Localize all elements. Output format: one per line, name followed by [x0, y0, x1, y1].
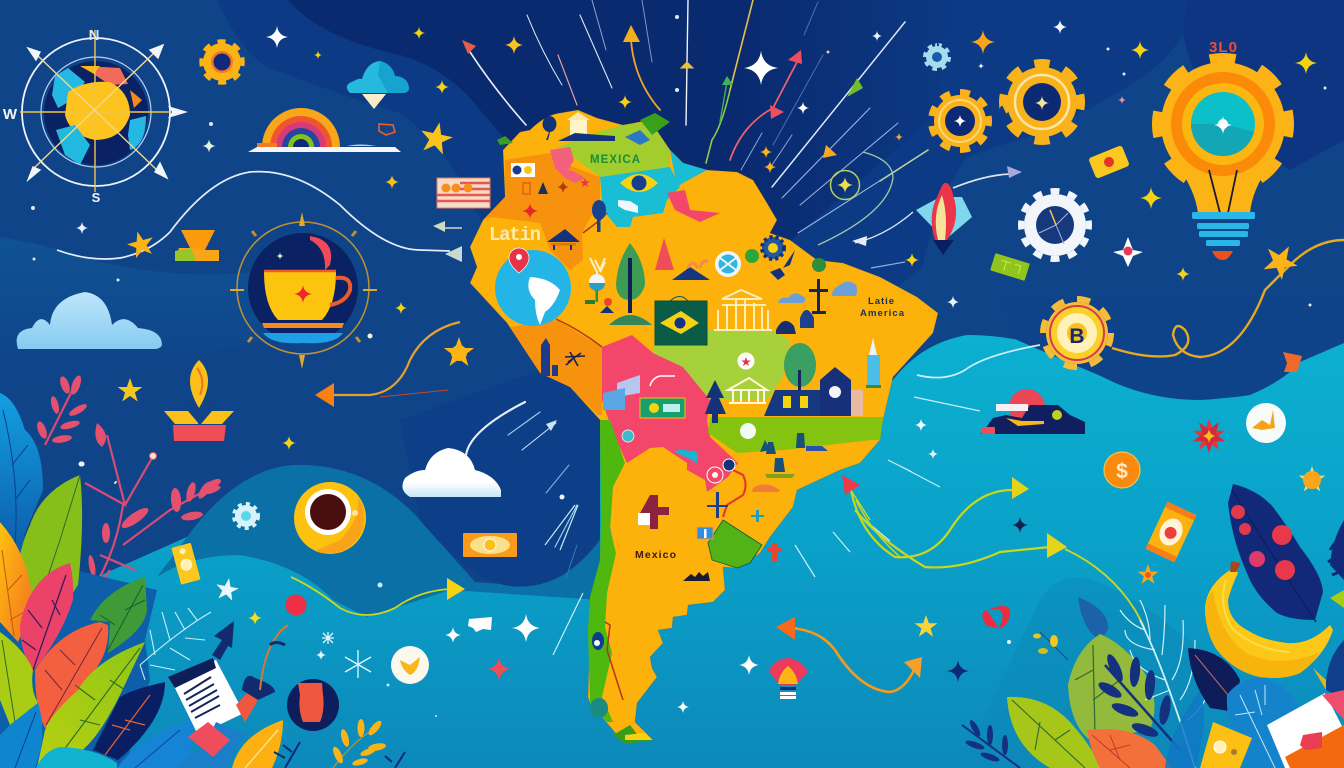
icon: blue tag	[697, 527, 713, 539]
icon: white hall	[728, 378, 767, 403]
globe	[44, 61, 148, 165]
sparkles top right	[947, 20, 1326, 308]
bulb label: 3L0	[1209, 39, 1237, 56]
region: west orange	[483, 153, 600, 270]
leaf: green top	[18, 475, 82, 620]
icon: orange banknote	[463, 533, 517, 557]
region: pink north	[667, 190, 720, 222]
leaves right edge	[1326, 520, 1344, 700]
compass rings	[22, 38, 170, 186]
region: bright green	[708, 417, 883, 453]
icon: rainbow on shelf	[248, 108, 401, 152]
icon: tree and town	[764, 343, 863, 416]
star: yellow right sea	[915, 615, 937, 637]
sparkles top centre	[505, 15, 903, 173]
leaf: orange yellow	[0, 522, 31, 642]
gear: gold large	[997, 57, 1087, 147]
icon: orange blob	[752, 484, 780, 492]
bay streaks	[466, 402, 577, 578]
icon: green banknote	[990, 253, 1030, 281]
icon: red cone	[655, 238, 674, 270]
twig	[260, 625, 288, 690]
arrow: thin with orange head	[782, 108, 870, 198]
map label: Mexico: Mexico	[635, 549, 676, 561]
icon: white block	[618, 200, 638, 213]
sparkle stars left	[31, 26, 449, 483]
leaf: blue mid	[1078, 597, 1108, 640]
leaf: blue	[0, 393, 43, 545]
icon: stilt hut	[547, 229, 580, 250]
leaf: lime edge	[1330, 590, 1344, 608]
icon: pale snow gear	[234, 504, 258, 528]
icon: cross	[809, 279, 828, 314]
pink branches	[35, 374, 223, 600]
leaf: lime big	[37, 642, 145, 768]
gear: gold small	[927, 88, 993, 154]
circle: red	[286, 594, 306, 616]
label S: S	[92, 190, 101, 205]
map: South America	[470, 110, 938, 744]
icon: cloud hill with sun	[981, 389, 1085, 434]
foliage shadow backing	[0, 520, 157, 768]
icon: blue signs	[603, 375, 640, 410]
icon: flag striped	[437, 178, 490, 208]
icon: small red cross off coast	[767, 543, 782, 562]
sprig: yellow buds	[1033, 632, 1068, 660]
icon: hot air balloon	[916, 183, 972, 255]
icon: small orange snowflake	[379, 124, 395, 135]
icon: coffee cup badge	[230, 212, 377, 369]
icon: dark pine	[705, 380, 726, 423]
icon: red flower	[1188, 413, 1232, 457]
icon: mountain glow	[688, 261, 708, 268]
fern: navy right edge	[1328, 530, 1344, 575]
icon: small green bush	[497, 136, 513, 145]
arrow: orange curve sea	[776, 617, 922, 692]
icon: gear blue	[762, 237, 784, 259]
arrow: white left	[462, 40, 526, 125]
small arrows by flag	[433, 221, 462, 262]
small lines right coast	[545, 397, 980, 655]
region: north light green	[557, 122, 670, 177]
icon: eye	[620, 174, 658, 192]
compass needles	[20, 30, 188, 192]
compass inner ring	[41, 57, 151, 167]
sprig: navy low	[962, 719, 1020, 768]
twig leaf	[270, 642, 285, 645]
icon: gear medal	[1043, 299, 1111, 367]
leaf: gold bottom	[232, 720, 283, 768]
icon: white circle bird	[391, 646, 429, 684]
icon: tree blue	[592, 200, 606, 232]
icon: pink target	[707, 467, 723, 483]
icon: white note sea	[468, 617, 492, 632]
leaf: cyan bottom	[36, 747, 117, 768]
icon: flag badge pair	[511, 163, 535, 177]
leaf: navy edge top	[1330, 520, 1344, 580]
map label: Latin America: Latie	[868, 296, 894, 307]
right bottom cluster	[962, 530, 1344, 768]
icon: banana	[1205, 561, 1333, 690]
icon: coffee cup top view	[294, 482, 366, 554]
icon: red heart	[982, 606, 1010, 629]
snowflakes sea	[322, 632, 371, 678]
arrow: gold looped path with star	[1112, 238, 1344, 357]
star on wavy line	[125, 228, 157, 259]
star: small gold left	[118, 378, 142, 402]
icon: green banner	[640, 398, 685, 418]
gear medal letter: B	[1069, 325, 1085, 348]
plant: yellow sprig	[331, 719, 386, 768]
map label: America: America	[860, 308, 905, 319]
icon: pale clouds	[778, 282, 857, 303]
icon: yellow card	[1200, 722, 1252, 768]
icon: white tower	[866, 338, 881, 388]
compass globe	[3, 27, 188, 205]
icon: pink blob	[550, 147, 585, 183]
arrow: white with green head	[772, 22, 905, 187]
icon: teal plus	[751, 510, 764, 522]
icon: plum cross	[638, 495, 669, 529]
leaf: navy	[93, 682, 165, 760]
icon: target with curved arrow	[818, 152, 913, 246]
leaf: coral low	[1087, 729, 1172, 768]
icon: orange burst	[1299, 466, 1325, 491]
pale curve to medal	[917, 345, 1040, 378]
arrow: orange up	[623, 25, 660, 110]
leaf: blue low	[0, 703, 42, 768]
icon: mini mountains	[683, 572, 710, 581]
icon: mountain	[672, 267, 710, 280]
icon: small orange flower	[1138, 564, 1158, 584]
icon: columned building	[714, 290, 772, 330]
icon: tree on plate	[765, 458, 795, 478]
leaf: lime low	[1007, 697, 1100, 768]
arrow: white curved	[466, 402, 525, 455]
arrow: white to gears	[953, 166, 1022, 188]
spark: yellow	[248, 611, 262, 625]
arrow: orange curve to left	[315, 322, 460, 407]
icon: mini west row	[522, 178, 590, 219]
navy petals	[242, 676, 275, 700]
icon: cloud parachute	[347, 61, 409, 109]
map label: Latin: Latin	[489, 224, 541, 246]
gear: pale blue small	[925, 45, 949, 69]
document sheet	[168, 658, 244, 735]
arrow: yellow small	[871, 253, 919, 268]
icon: red gem star	[1113, 237, 1143, 267]
label W: W	[3, 106, 18, 123]
leaf: pink	[20, 563, 73, 672]
icon: arc	[650, 376, 675, 386]
white fern left	[140, 608, 211, 680]
icon: small house and hills north	[558, 112, 670, 145]
region: south-west orange	[510, 320, 602, 415]
leaf: blue under fern	[1165, 690, 1204, 768]
icon: gold note	[171, 543, 201, 585]
arrow: red tip yellow swirl	[842, 475, 1145, 630]
region: light green centre	[653, 330, 790, 400]
feather: white fern	[1120, 600, 1205, 768]
icon: dark trees bottom	[760, 433, 828, 454]
region: Pacific green strip	[588, 420, 625, 722]
icon: hourglass block	[175, 230, 219, 261]
star: white	[214, 576, 240, 602]
arrow: navy up	[212, 621, 234, 660]
icon: teal seal	[622, 430, 634, 442]
icon: dark circle with red	[287, 679, 339, 731]
arrow: yellow left sea	[291, 577, 465, 615]
left leaves cluster	[0, 393, 193, 768]
icon: green round	[812, 258, 826, 272]
icon: white cloud	[402, 448, 501, 497]
icon: light blue cloud	[17, 292, 162, 349]
icon: dark domes	[776, 310, 814, 334]
icon: lotus lamp	[164, 360, 234, 441]
icon: white round	[740, 423, 756, 439]
icon: envelope	[1267, 690, 1344, 768]
icon: document with arrow	[168, 621, 288, 768]
arrow: pink	[730, 50, 802, 160]
icon: gear light bulb	[1145, 46, 1301, 260]
icon: orange star corner	[1283, 352, 1302, 372]
icon: orange can	[1146, 502, 1196, 562]
icon: yellow ticket	[1088, 145, 1130, 179]
star: gold by compass	[417, 119, 455, 156]
leaf: blue broad	[1227, 678, 1305, 768]
leaf: navy dark	[1188, 648, 1240, 712]
region: cyan	[600, 150, 707, 227]
icon: dark leaf pair	[770, 250, 795, 280]
icon: Brazil flag	[655, 296, 707, 345]
icon: tree dark	[542, 116, 556, 140]
background: lower sea	[0, 300, 1344, 768]
icon: coral tree mark	[585, 258, 605, 304]
blue sleeve	[175, 722, 245, 768]
gear: white	[1017, 187, 1093, 263]
icon: blue cloud patch	[674, 450, 698, 463]
plant: navy sprigs bottom	[274, 742, 405, 768]
leaf: navy with red dots	[1228, 484, 1323, 622]
leaf: coral	[35, 622, 108, 728]
leaf: olive big	[1068, 634, 1154, 740]
leaf: lime left	[0, 632, 38, 725]
wavy white line	[57, 172, 450, 259]
border lines	[556, 213, 623, 700]
icon: flower yellow	[444, 337, 474, 366]
map label: Mexica: MEXICA	[590, 154, 640, 166]
hand cuff	[236, 690, 258, 722]
icon: yellow gear top left	[198, 38, 246, 86]
icon: lighthouse and palm	[541, 338, 585, 376]
icon: globe lake	[495, 250, 571, 326]
icon: navy plus	[707, 492, 728, 518]
hand block	[188, 722, 230, 757]
icon: shell lamp	[769, 658, 808, 699]
icon: green medallion with star	[738, 352, 754, 370]
spark: sea cluster	[316, 419, 1028, 717]
leaf: blue mid	[117, 720, 193, 768]
icon: location pin	[509, 248, 529, 273]
leaf: navy edge low	[1326, 640, 1344, 700]
icon: small pink plant	[600, 298, 614, 313]
icon: clock globe	[715, 251, 741, 277]
icon: big tree	[609, 243, 652, 325]
region: pink central	[602, 335, 738, 492]
icon: patagonia colour patches	[590, 632, 655, 744]
label N: N	[89, 27, 99, 44]
top rays and arrows	[462, 0, 928, 233]
map base outline	[470, 110, 938, 742]
arrow: green small	[720, 76, 733, 122]
dots left	[80, 462, 116, 484]
icon: dollar coin	[1104, 452, 1140, 488]
region: Uruguay green	[708, 520, 762, 568]
dollar label: $	[1116, 460, 1128, 483]
icon: green badge	[745, 249, 759, 263]
fern: navy	[1096, 652, 1180, 750]
icon: small medal	[723, 459, 735, 471]
icon: white circle swan	[1246, 403, 1286, 443]
leaf: green right	[90, 577, 147, 653]
